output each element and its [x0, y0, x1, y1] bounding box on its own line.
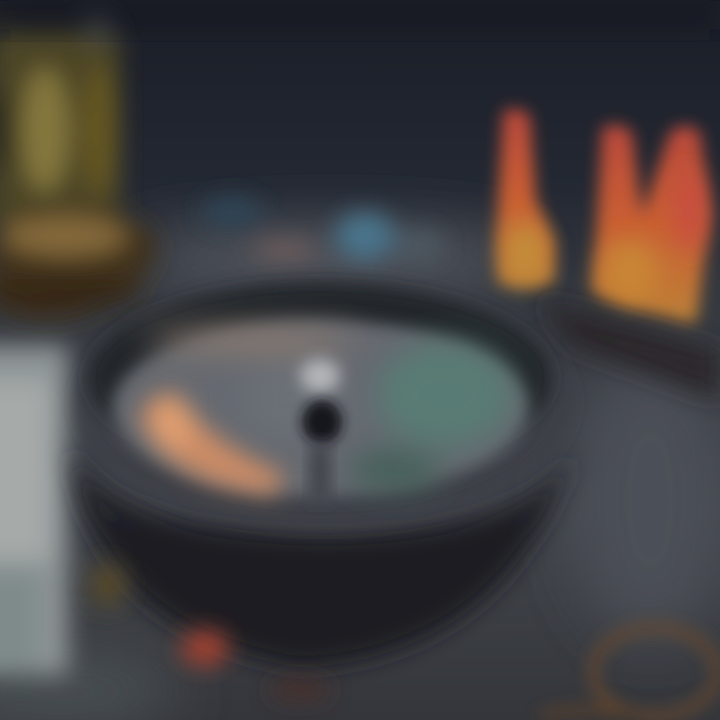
bowl rim	[79, 278, 571, 526]
gauge face	[112, 320, 528, 496]
chart: flame bars	[496, 109, 710, 324]
table haze	[0, 232, 720, 720]
icon: blue mounds	[200, 198, 444, 260]
gauge colours	[145, 328, 513, 488]
gauge hub	[300, 359, 342, 500]
icon: copper coil	[540, 628, 717, 716]
bowl body	[70, 430, 580, 668]
embers	[90, 563, 332, 700]
icon: golden jar	[0, 14, 158, 320]
vignette	[0, 0, 720, 30]
shelf shadow	[540, 300, 720, 400]
flame highlights	[507, 170, 704, 304]
panel: white column	[0, 345, 68, 675]
bowl	[70, 278, 580, 668]
rim dark inner edge	[88, 284, 552, 472]
